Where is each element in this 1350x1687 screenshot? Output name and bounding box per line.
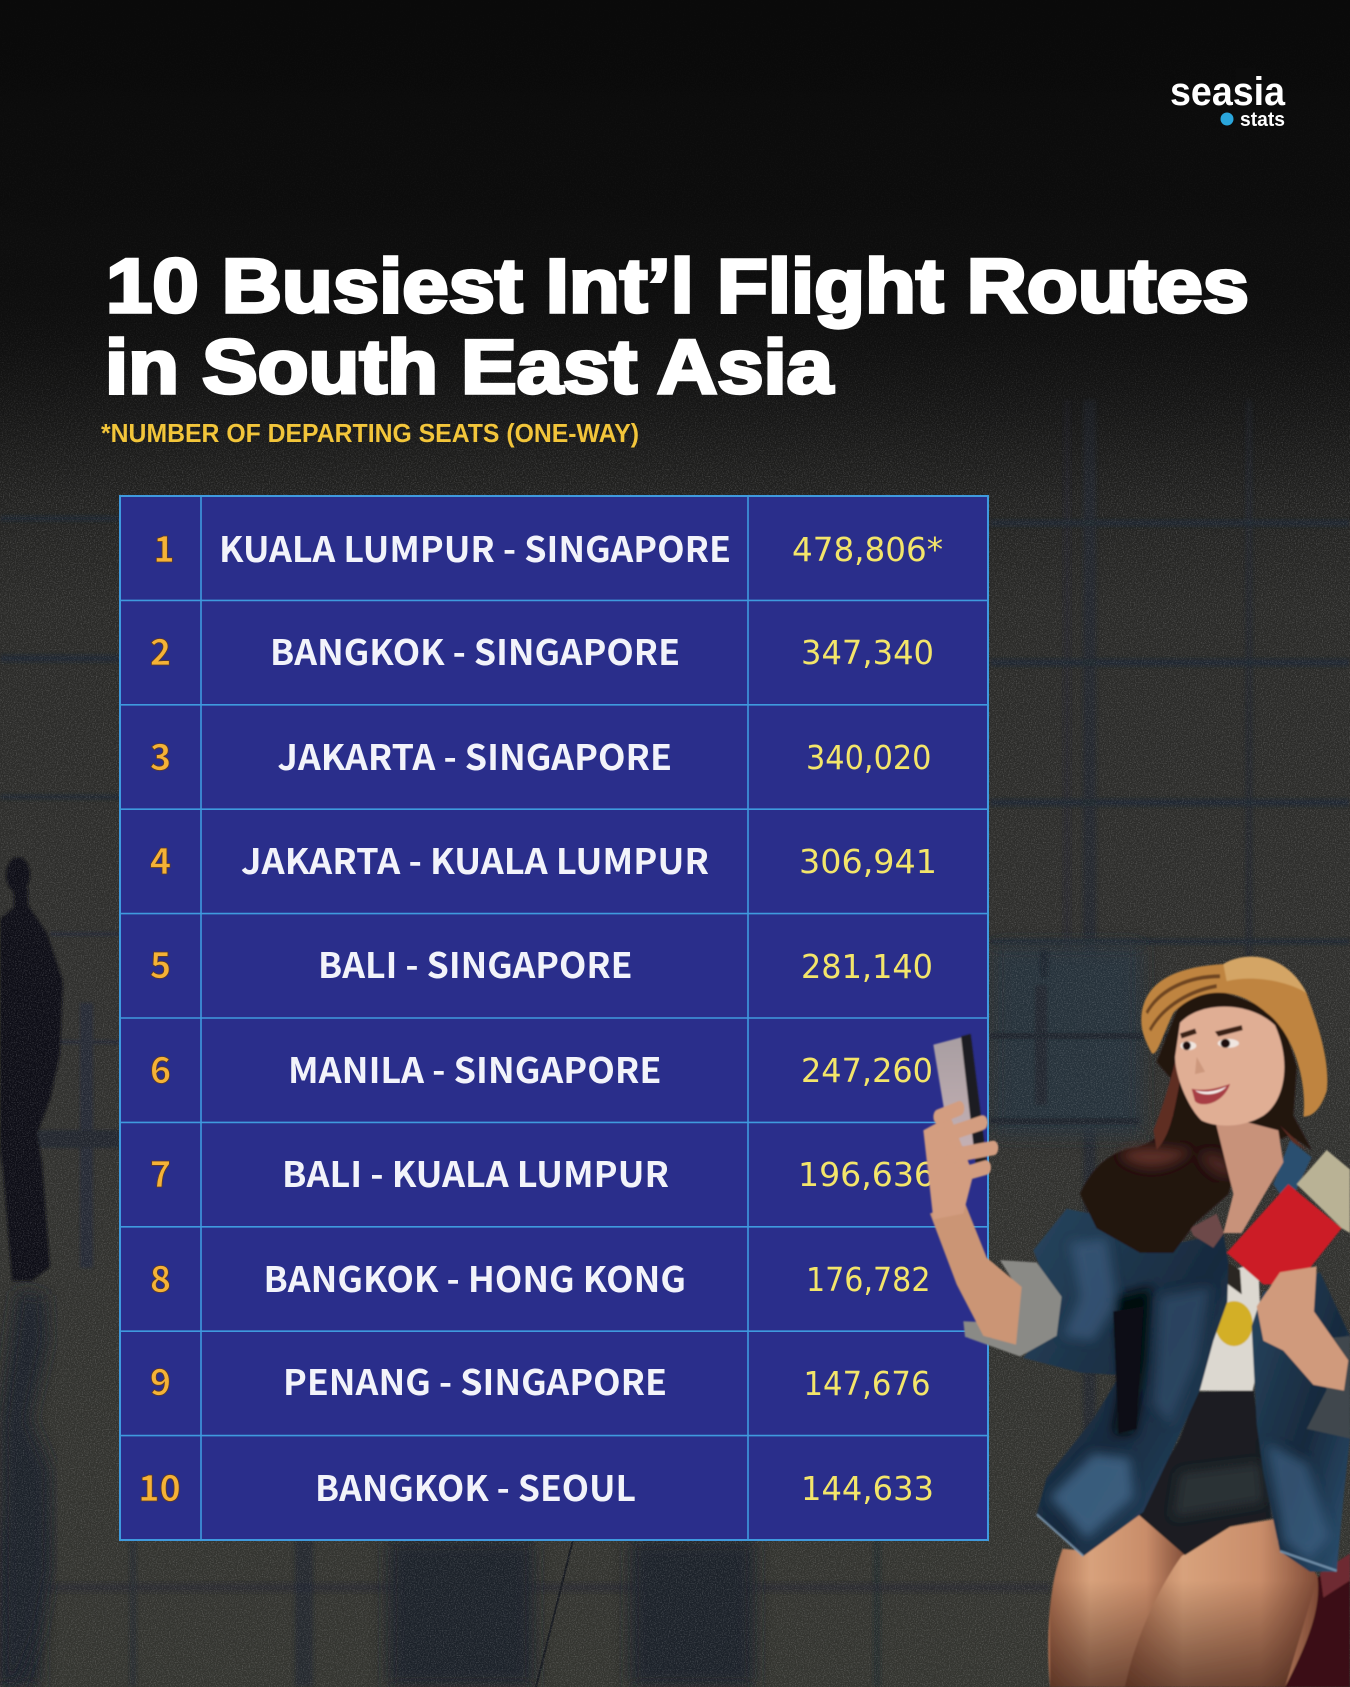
title: 10 Busiest Int’l Flight Routes: [106, 244, 1249, 329]
row 7: 7: [150, 1146, 171, 1198]
row 3: 3: [150, 729, 171, 781]
row 8: 176,782: [806, 1260, 930, 1299]
row 2: 347,340: [801, 633, 934, 672]
row 10: 144,633: [801, 1469, 934, 1508]
row 6: [150, 1042, 933, 1094]
jacket cuff: [963, 1260, 1062, 1356]
row 1: [153, 521, 943, 573]
row 1: KUALA LUMPUR - SINGAPORE: [219, 522, 731, 573]
title: in South East Asia: [105, 325, 834, 410]
row 9: PENANG - SINGAPORE: [283, 1355, 667, 1406]
neck: [1213, 1113, 1283, 1233]
row 1: 478,806*: [792, 530, 943, 569]
suitcase: [1285, 1554, 1350, 1687]
top dark fade: [0, 0, 1350, 500]
phone: [933, 1034, 987, 1167]
legs: [1048, 1514, 1318, 1687]
silhouette: traveller on the left: [0, 857, 120, 1687]
row 8: 8: [150, 1251, 171, 1303]
jacket: [1023, 1140, 1350, 1572]
row 6: MANILA - SINGAPORE: [288, 1043, 662, 1094]
row 5: BALI - SINGAPORE: [318, 938, 632, 989]
shorts: [1137, 1390, 1272, 1555]
row 2: [150, 624, 934, 676]
row 5: 5: [150, 937, 171, 989]
row 4: [150, 833, 937, 885]
hand holding phone: [923, 1108, 993, 1219]
row 4: 306,941: [799, 842, 937, 881]
passport: [1227, 1184, 1342, 1284]
subtitle: *NUMBER OF DEPARTING SEATS (ONE-WAY): [101, 418, 639, 448]
money: [1297, 1150, 1350, 1233]
row 7: [150, 1146, 935, 1198]
straw hat: [1141, 957, 1327, 1117]
row 8: BANGKOK - HONG KONG: [264, 1252, 686, 1303]
row 8: [150, 1251, 930, 1303]
logo: seasia stats: seasia: [1170, 70, 1286, 114]
row 9: 9: [150, 1354, 171, 1406]
row 10: BANGKOK - SEOUL: [315, 1461, 636, 1512]
row 7: 196,636: [798, 1155, 935, 1194]
row 2: 2: [150, 624, 171, 676]
row 1: 1: [153, 521, 175, 573]
face: [1175, 1007, 1284, 1126]
second hand: [1257, 1266, 1348, 1391]
row 9: [150, 1354, 930, 1406]
row 5: 281,140: [801, 947, 933, 986]
forearm: [930, 1199, 1022, 1345]
logo: seasia stats: [1170, 68, 1286, 131]
row 3: JAKARTA - SINGAPORE: [278, 730, 672, 781]
row 4: 4: [150, 833, 171, 885]
hair: [1080, 988, 1312, 1253]
row 5: [150, 937, 933, 989]
row 3: [150, 729, 932, 781]
row 3: 340,020: [806, 738, 932, 777]
row 9: 147,676: [804, 1364, 930, 1403]
title: [105, 244, 1249, 410]
row 6: 6: [150, 1042, 171, 1094]
row 10: [138, 1460, 934, 1512]
illustration: smiling traveller with phone, passport and hat: [923, 957, 1350, 1687]
row 6: 247,260: [801, 1051, 933, 1090]
row 7: BALI - KUALA LUMPUR: [282, 1147, 669, 1198]
row 4: JAKARTA - KUALA LUMPUR: [241, 834, 709, 885]
row 10: 10: [138, 1460, 181, 1512]
table: flight routes ranking: [120, 496, 988, 1540]
row 2: BANGKOK - SINGAPORE: [270, 625, 680, 676]
t-shirt: [1197, 1258, 1262, 1391]
logo: seasia stats: stats: [1240, 109, 1285, 131]
